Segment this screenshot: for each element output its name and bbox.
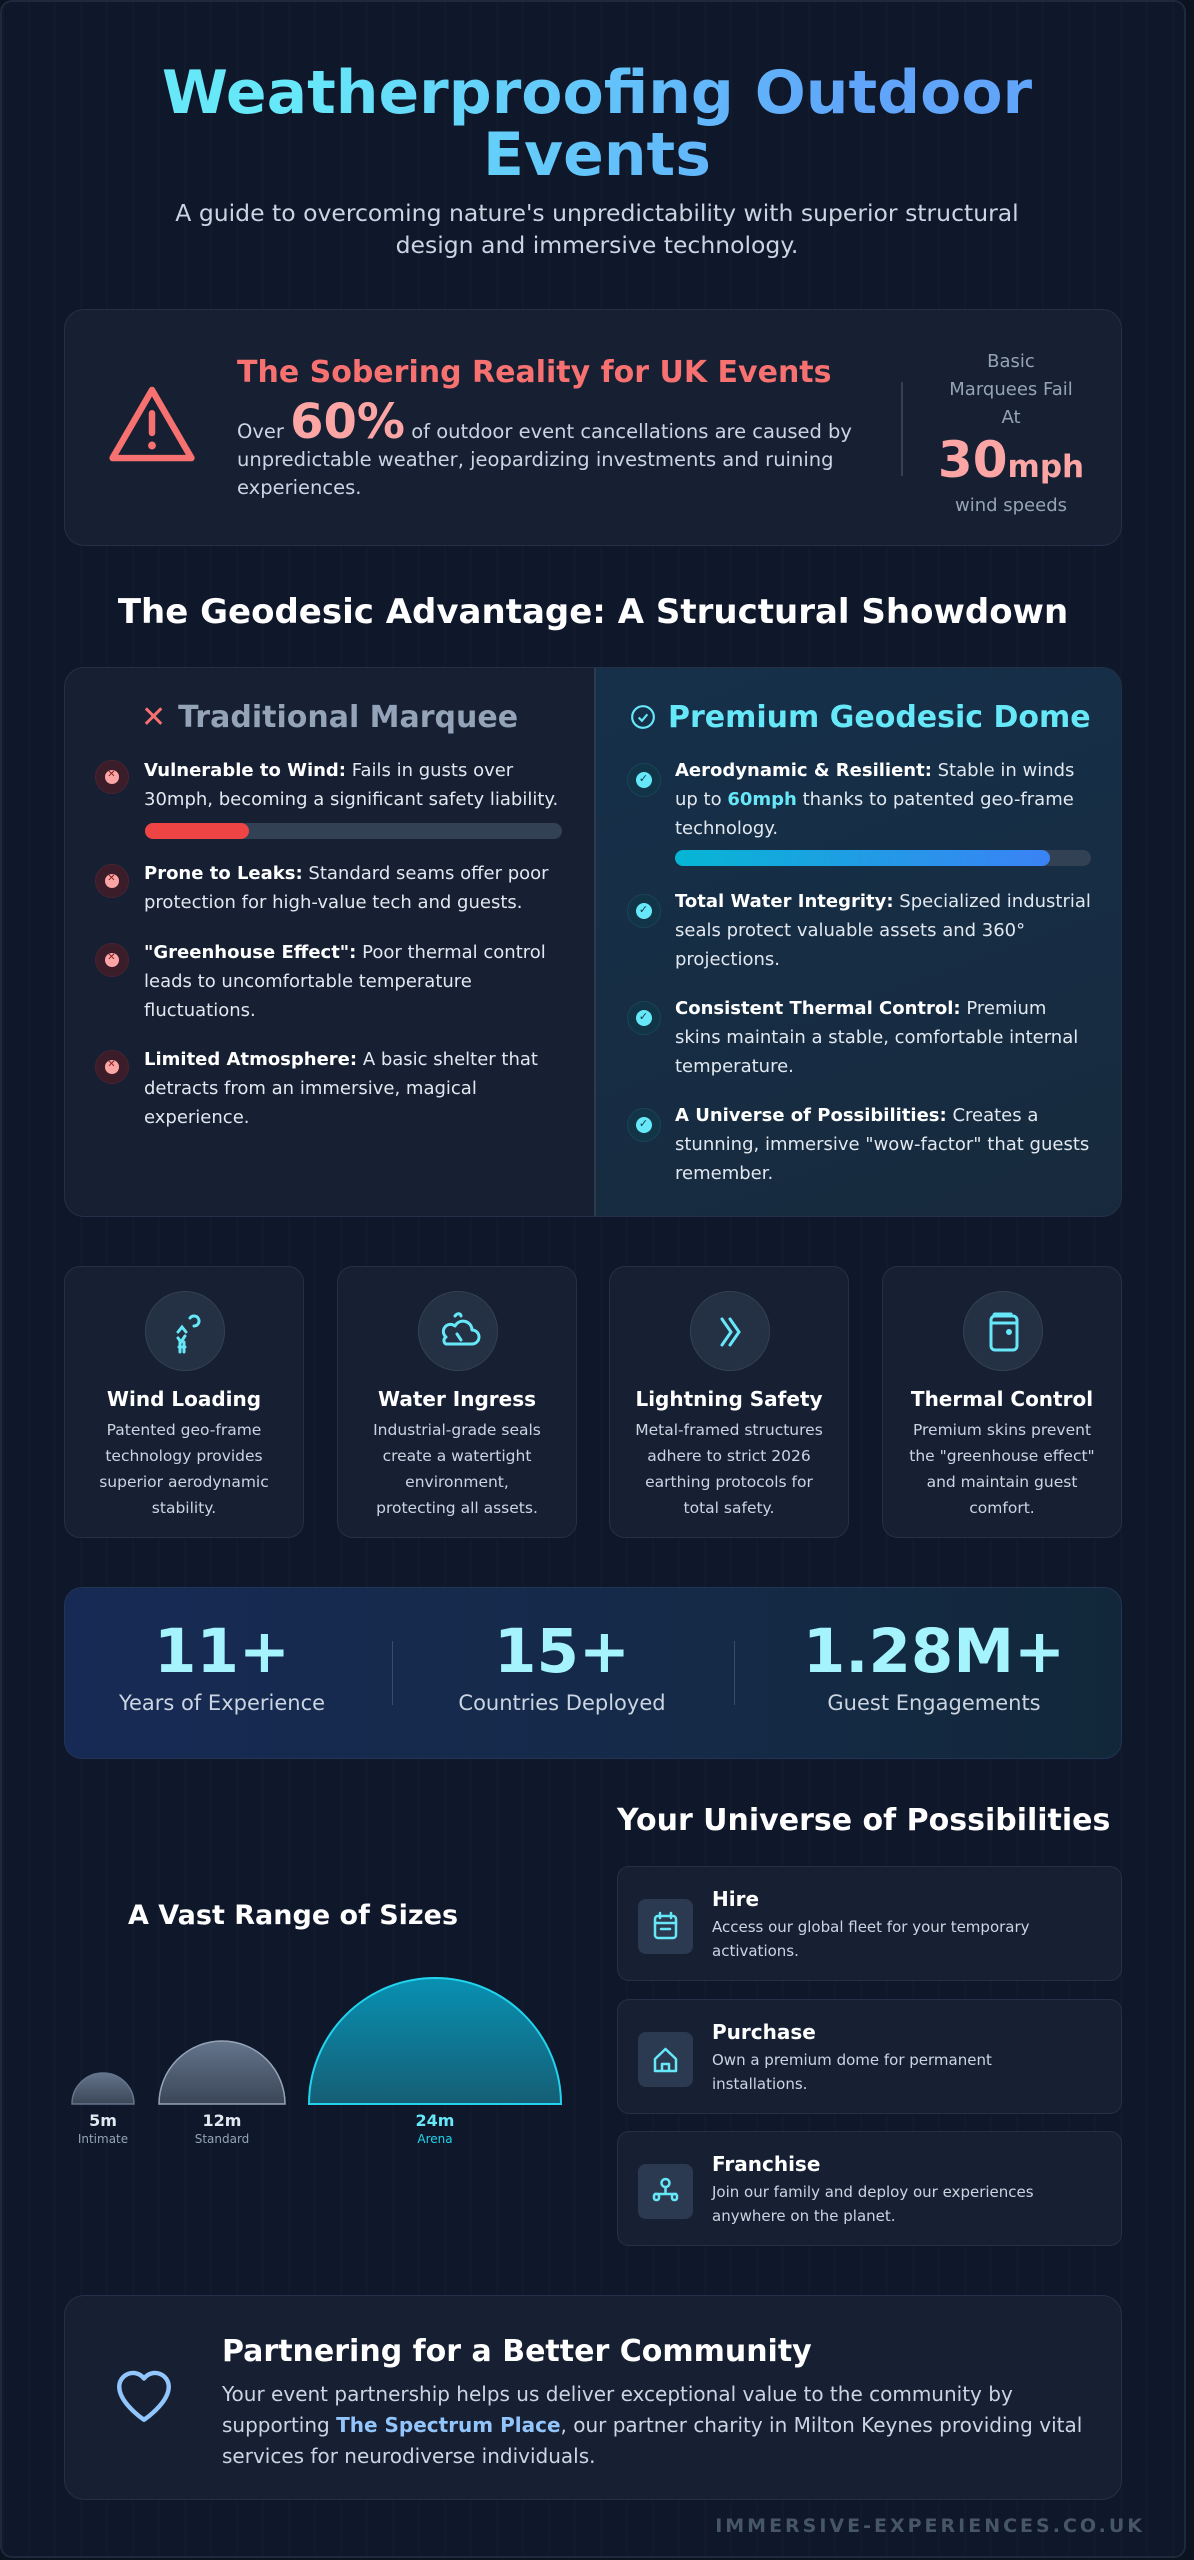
stat: years: 11+ — [154, 1616, 290, 1687]
icon: warning triangle — [109, 386, 195, 462]
right column: geodesic dome: ✓ — [639, 772, 648, 785]
card: thermal control: Premium skins prevent the "greenhouse effect" and maintain guest comfort. — [909, 1421, 1095, 1517]
body text: Over 60% of outdoor event cancellations are caused by unpredictable weather, jeopardizing investments and ruining experiences. — [237, 394, 852, 499]
stat: guests: 1.28M+ — [803, 1616, 1065, 1687]
footer: website: IMMERSIVE-EXPERIENCES.CO.UK — [715, 2515, 1145, 2537]
right column: geodesic dome: ✓ — [639, 903, 648, 916]
right column: geodesic dome: Consistent Thermal Control: Premium skins maintain a stable, comfortable internal temperature. — [675, 998, 1078, 1077]
option: hire: Hire — [712, 1887, 759, 1911]
option: hire: Access our global fleet for your temporary activations. — [712, 1918, 1030, 1960]
heading: universe of possibilities: Your Universe of Possibilities — [617, 1803, 1110, 1838]
left column: traditional marquee: ✕ — [107, 1059, 116, 1070]
icon: thermal container — [963, 1291, 1043, 1371]
card: wind loading: Patented geo-frame technology provides superior aerodynamic stability. — [99, 1421, 269, 1517]
card: wind loading: Wind Loading — [107, 1387, 261, 1411]
heading: Partnering for a Better Community — [222, 2334, 812, 2369]
card: water ingress: protecting all assets. — [376, 1499, 538, 1517]
card: wind loading — [64, 1266, 304, 1538]
icon: chevrons — [690, 1291, 770, 1371]
body text: Your event partnership helps us deliver exceptional value to the community by supporting The Spectrum Place, our partner charity in Milton Keynes providing vital services for neurodiverse individuals. — [222, 2382, 1082, 2468]
chart: dome sizes: 12m — [203, 2111, 241, 2130]
stat: 30mph: Basic — [987, 351, 1035, 372]
chart: dome sizes — [71, 1977, 562, 2146]
icon: calendar — [638, 1899, 693, 1954]
chart: dome sizes: Arena — [417, 2132, 453, 2146]
icon: network — [638, 2164, 693, 2219]
bar: wind tolerance — [675, 850, 1091, 866]
subtitle: A guide to overcoming nature's unpredictability with superior structural design and immersive technology. — [175, 199, 1019, 259]
card: lightning safety: Metal-framed structures adhere to strict 2026 earthing protocols for total safety. — [635, 1421, 823, 1517]
option: franchise: Franchise — [712, 2152, 820, 2176]
card: water ingress: Water Ingress — [378, 1387, 536, 1411]
left column: traditional marquee — [95, 700, 562, 1128]
icon: heart — [117, 2370, 171, 2422]
icon: wind — [145, 1291, 225, 1371]
stat: 30mph: 30mph — [938, 431, 1084, 489]
left column: traditional marquee: "Greenhouse Effect": Poor thermal control leads to uncomfortable temperature fluctuations. — [144, 942, 546, 1021]
right column: geodesic dome: A Universe of Possibilities: Creates a stunning, immersive "wow-factor" that guests remember. — [675, 1105, 1089, 1184]
left column: traditional marquee: ✕ — [107, 873, 116, 884]
left column: traditional marquee: ✕ — [107, 769, 116, 780]
option: hire — [617, 1866, 1122, 1981]
chart: dome sizes: 24m — [416, 2111, 454, 2130]
stat: years — [119, 1616, 325, 1715]
chart: dome sizes: 5m — [89, 2111, 117, 2130]
right column: geodesic dome: Total Water Integrity: Specialized industrial seals protect valuable assets and 360° projections. — [675, 891, 1091, 970]
left column: traditional marquee: ✕ — [107, 952, 116, 963]
stat: years: Years of Experience — [119, 1691, 325, 1715]
right column: geodesic dome: ✓ — [639, 1010, 648, 1023]
card: thermal control — [882, 1266, 1122, 1538]
title: Weatherproofing Outdoor Events — [162, 58, 1032, 190]
icon: cloud rain — [418, 1291, 498, 1371]
stat: 30mph: At — [1001, 407, 1021, 428]
option: franchise: Join our family and deploy our experiences anywhere on the planet. — [712, 2183, 1034, 2225]
icon: house — [638, 2032, 693, 2087]
stat: 30mph: wind speeds — [955, 495, 1067, 516]
heading: ✕ Traditional Marquee — [141, 700, 518, 735]
right column: geodesic dome: ✓ — [639, 1117, 648, 1130]
card: lightning safety: Lightning Safety — [635, 1387, 823, 1411]
left column: traditional marquee: Prone to Leaks: Standard seams offer poor protection for high-value tech and guests. — [144, 863, 549, 913]
panel: sobering reality — [64, 309, 1122, 546]
panel: comparison — [64, 667, 1122, 1217]
stat: guests: Guest Engagements — [827, 1691, 1041, 1715]
heading: geodesic advantage: The Geodesic Advantage: A Structural Showdown — [118, 592, 1068, 632]
chart: dome sizes: Intimate — [78, 2132, 128, 2146]
heading: The Sobering Reality for UK Events — [237, 355, 832, 390]
option: purchase — [617, 1999, 1122, 2114]
option: purchase: Purchase — [712, 2020, 816, 2044]
card: thermal control: Thermal Control — [911, 1387, 1093, 1411]
stat: countries: Countries Deployed — [458, 1691, 666, 1715]
heading: Premium Geodesic Dome — [668, 700, 1091, 735]
right column: geodesic dome — [627, 700, 1091, 1184]
heading: sizes: A Vast Range of Sizes — [128, 1900, 458, 1931]
stat: countries — [458, 1616, 666, 1715]
left column: traditional marquee: Vulnerable to Wind: Fails in gusts over 30mph, becoming a significant safety liability. — [144, 760, 558, 810]
banner: stats — [64, 1587, 1122, 1759]
chart: dome sizes: Standard — [195, 2132, 249, 2146]
bar: wind tolerance — [145, 823, 562, 839]
stat: countries: 15+ — [494, 1616, 630, 1687]
stat: 30mph — [938, 351, 1084, 516]
right column: geodesic dome: Aerodynamic & Resilient: Stable in winds up to 60mph thanks to patented geo-frame technology. — [675, 760, 1074, 839]
card: water ingress: Industrial-grade seals create a watertight environment, — [373, 1421, 541, 1491]
panel: community — [64, 2295, 1122, 2500]
card: lightning safety — [609, 1266, 849, 1538]
option: franchise — [617, 2131, 1122, 2246]
left column: traditional marquee: Limited Atmosphere: A basic shelter that detracts from an immersive, magical experience. — [144, 1049, 538, 1128]
stat: 30mph: Marquees Fail — [949, 379, 1073, 400]
option: purchase: Own a premium dome for permanent installations. — [712, 2051, 992, 2093]
card: water ingress — [337, 1266, 577, 1538]
